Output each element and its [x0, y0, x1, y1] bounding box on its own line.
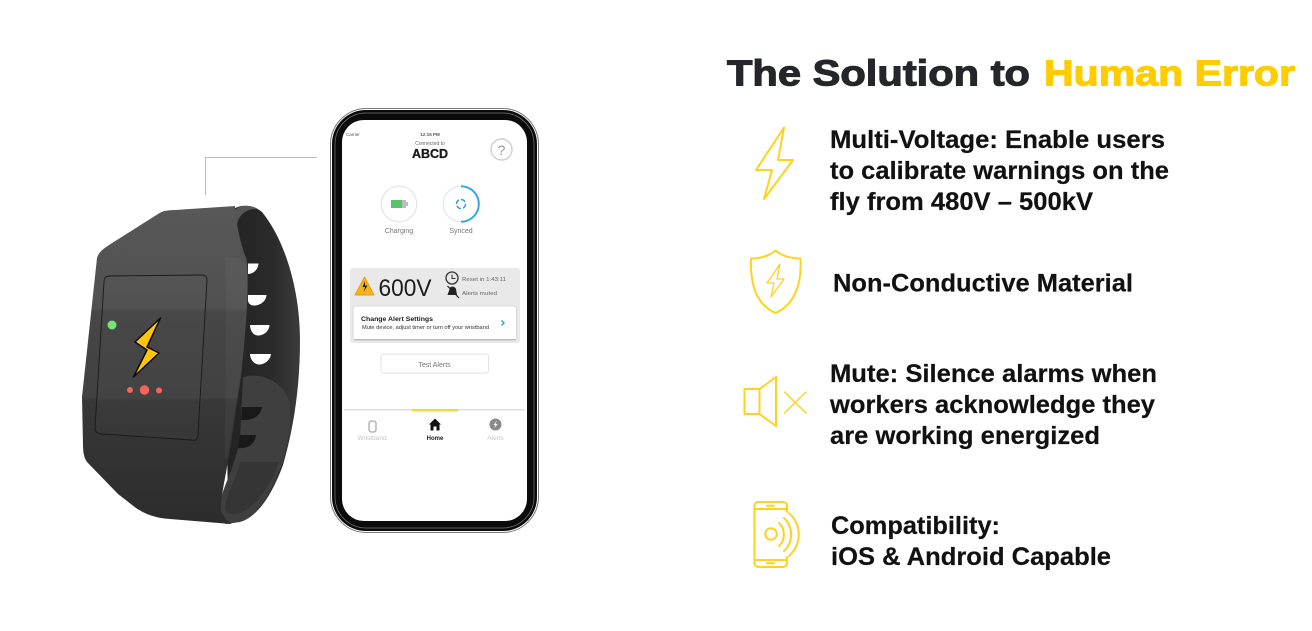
mute text: are working energized [830, 422, 1100, 450]
smartphone [330, 108, 538, 532]
help button [491, 139, 512, 160]
connector line [206, 158, 317, 195]
phone bezel [332, 110, 537, 531]
alert panel [350, 268, 520, 343]
red alert lights [127, 385, 162, 395]
feature: multi-voltage [756, 126, 1169, 216]
wristband tab [357, 421, 387, 442]
clasp holes [238, 407, 262, 448]
case side facet [225, 257, 248, 460]
connection heading: Connected to [415, 141, 445, 147]
mute text [829, 360, 1157, 450]
reset and mute labels [462, 277, 506, 297]
phone screen [342, 120, 527, 521]
multi-voltage text [830, 126, 1169, 216]
help button: ? [498, 142, 506, 158]
phone frame [330, 108, 538, 532]
mute text: workers acknowledge they [829, 391, 1155, 419]
phone bezel highlight [335, 113, 534, 528]
alert settings card: Change Alert Settings [361, 317, 434, 323]
clock icon [446, 272, 458, 284]
home tab [427, 418, 444, 442]
icon: muted speaker [744, 377, 806, 426]
strap top rim [233, 206, 258, 260]
feature: compatibility [754, 502, 1111, 571]
lightning bolt logo [134, 318, 160, 377]
icon: phone with signal [754, 502, 799, 567]
voltage reading: 600V [378, 275, 432, 302]
multi-voltage text: to calibrate warnings on the [830, 157, 1169, 185]
wristband tab: Wristband [357, 435, 387, 442]
icon: shield with bolt [751, 250, 801, 313]
tab bar [344, 409, 525, 442]
home tab: Home [427, 436, 444, 442]
strap holes [248, 264, 271, 364]
compatibility text: Compatibility: [831, 512, 1000, 540]
case body [82, 206, 248, 524]
non-conductive text: Non-Conductive Material [833, 270, 1133, 298]
back strap [225, 206, 300, 524]
status bar [346, 132, 440, 137]
mute text: Mute: Silence alarms when [830, 360, 1157, 388]
test alerts button: Test Alerts [418, 362, 451, 369]
feature: non-conductive material [751, 250, 1133, 313]
test alerts button [381, 354, 488, 373]
title: The Solution to [727, 52, 1030, 94]
compatibility text: iOS & Android Capable [831, 543, 1111, 571]
synced status [443, 186, 479, 235]
wristband device [82, 206, 300, 524]
muted bell icon [448, 286, 459, 298]
status bar: Carrier [346, 132, 360, 137]
charging status [381, 186, 417, 235]
reset and mute labels: Alerts muted [462, 291, 497, 297]
alert settings card [353, 306, 516, 340]
title [727, 52, 1295, 94]
charging status: Charging [385, 228, 413, 235]
clasp lower inner [225, 462, 279, 514]
screen panel [95, 275, 207, 440]
icon: lightning bolt [756, 128, 793, 199]
multi-voltage text: Multi-Voltage: Enable users [830, 126, 1165, 154]
alert settings card: Mute device, adjust timer or turn off your wristband [362, 325, 489, 331]
compatibility text [831, 512, 1111, 571]
multi-voltage text: fly from 480V – 500kV [830, 188, 1093, 216]
warning triangle [355, 277, 374, 295]
alerts tab: Alerts [487, 435, 505, 442]
title: Human Error [1044, 52, 1295, 94]
green status light [108, 320, 116, 330]
connection heading: ABCD [412, 147, 448, 161]
reset and mute labels: Reset in 1:43:11 [462, 277, 506, 283]
feature: mute [744, 360, 1157, 450]
synced status: Synced [449, 228, 473, 235]
clasp end [220, 376, 290, 524]
status bar: 12:15 PM [420, 132, 440, 137]
alerts tab [487, 418, 505, 442]
